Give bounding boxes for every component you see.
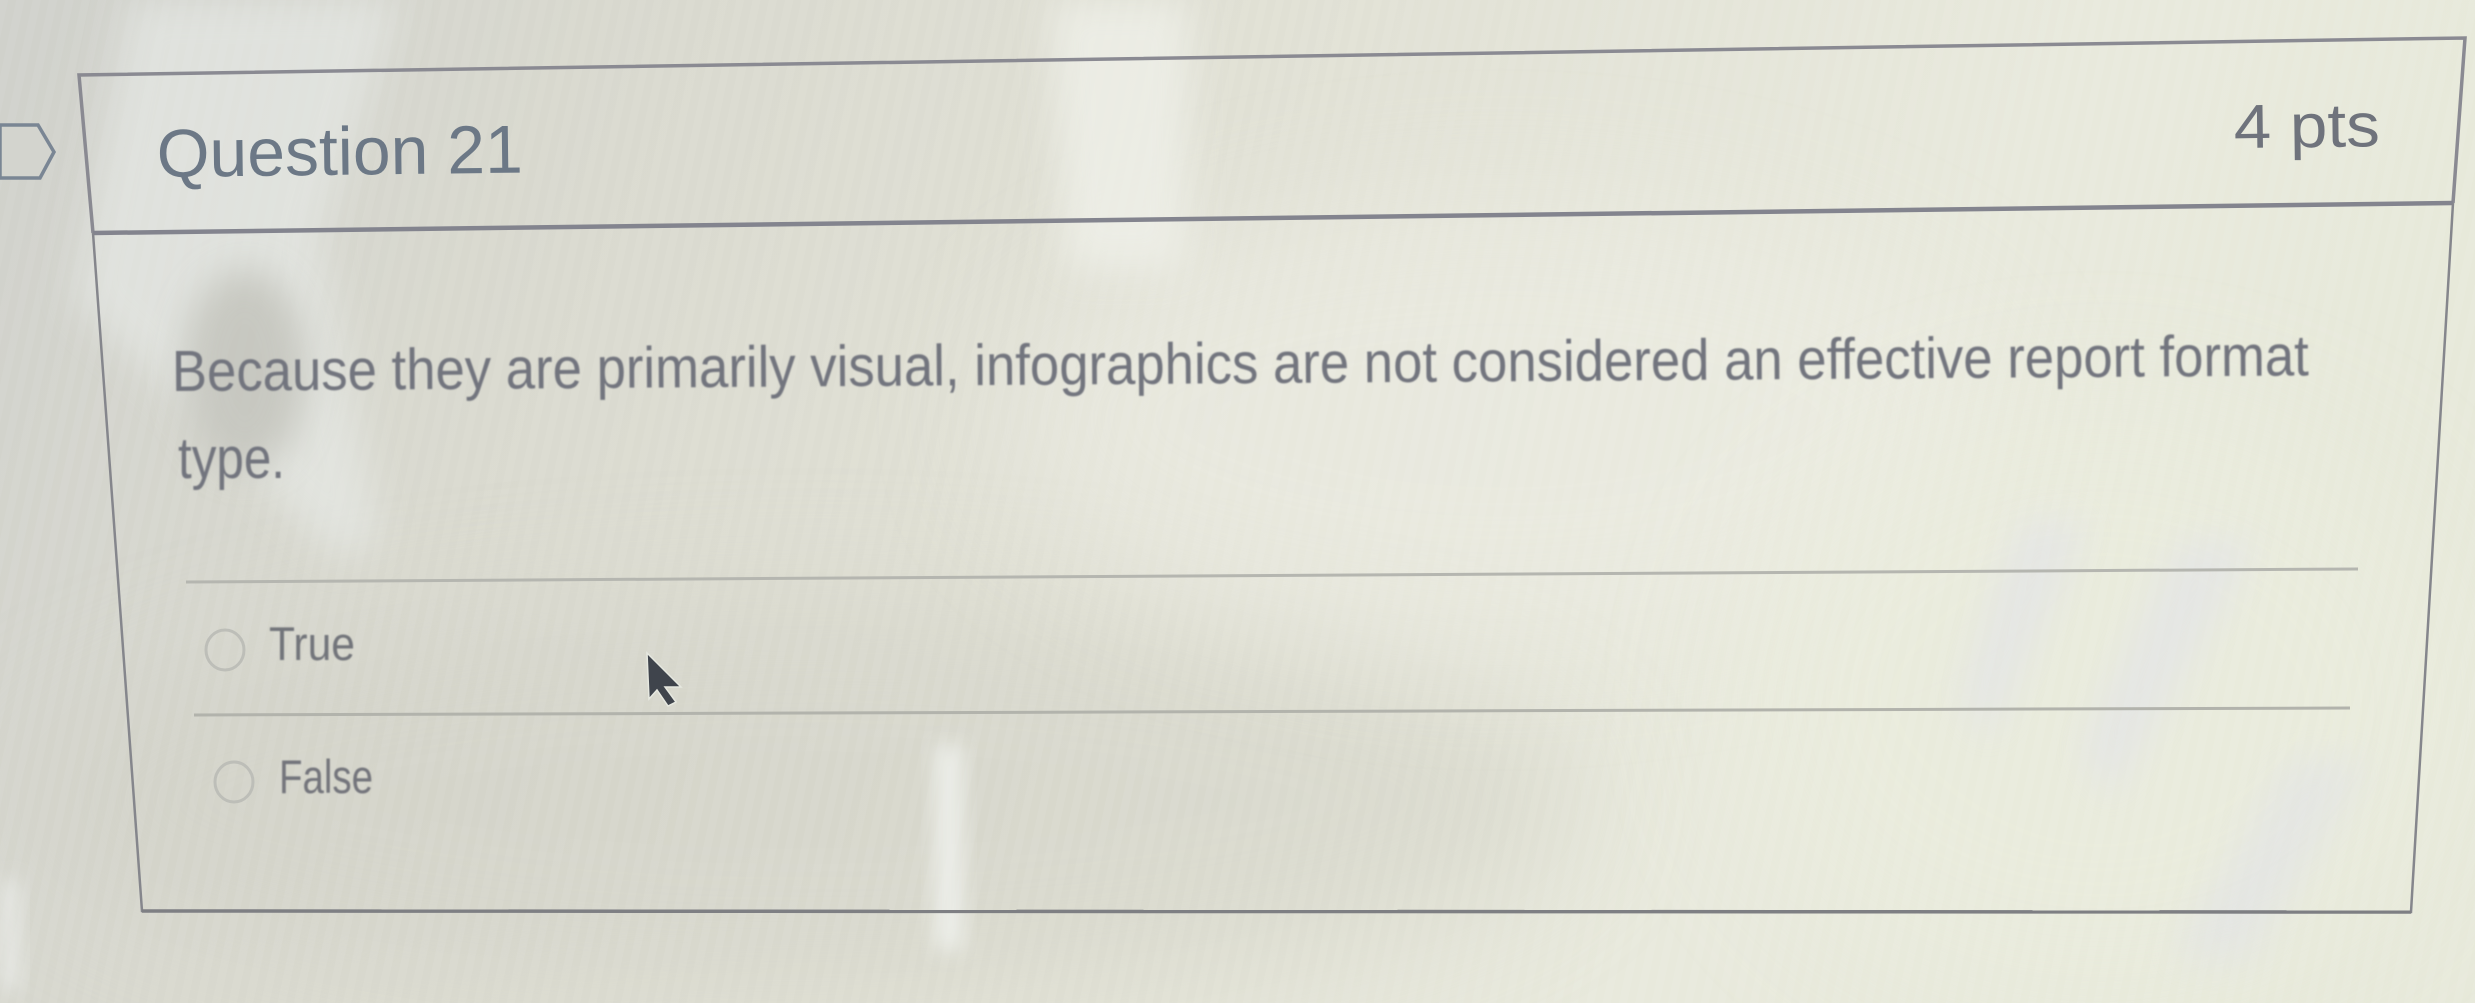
question text: Because they are primarily visual, infographics are not considered an effective report format	[172, 323, 2309, 404]
panel: question body	[93, 203, 2453, 912]
radio button: True	[206, 630, 244, 670]
divider above answers	[186, 569, 2358, 582]
heading: question number: Question 21	[156, 112, 523, 192]
answer option: True	[206, 617, 355, 670]
question text: type.	[178, 426, 285, 491]
icon: mouse cursor	[647, 653, 681, 706]
answer option: False: False	[279, 750, 373, 803]
panel: question header	[79, 38, 2465, 233]
divider between answers	[194, 708, 2350, 715]
radio button: False	[215, 762, 253, 802]
question tab marker	[0, 125, 54, 178]
answer option: False	[215, 750, 373, 803]
points value: 4 pts	[2233, 91, 2380, 162]
answer option: True: True	[269, 617, 355, 670]
question text	[172, 323, 2309, 491]
